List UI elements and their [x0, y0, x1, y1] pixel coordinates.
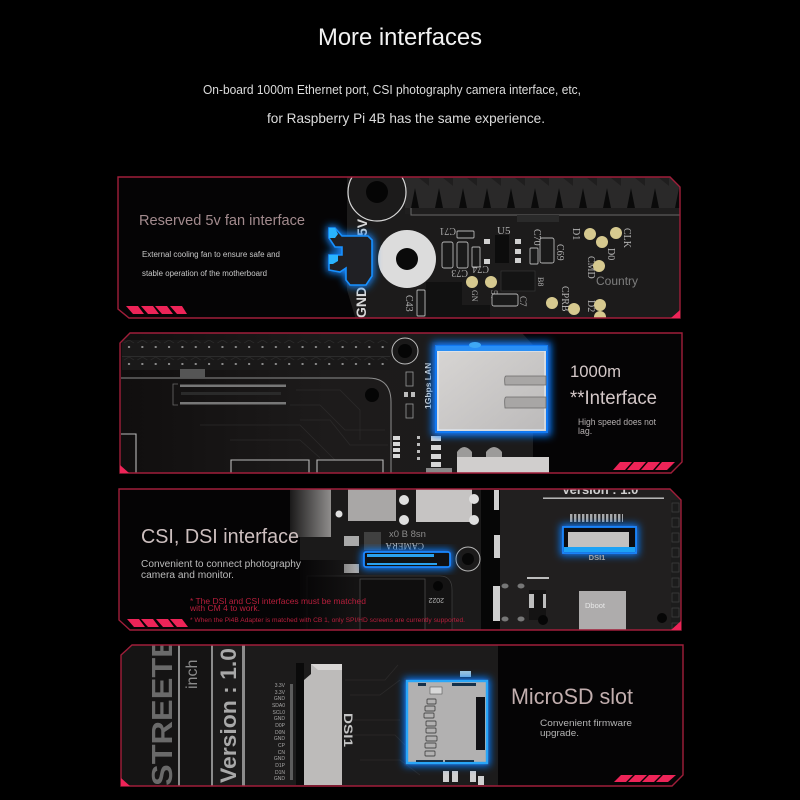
board photo: fan header area	[347, 178, 680, 318]
board photo: fan header area: B8	[536, 277, 545, 286]
description	[578, 417, 657, 436]
board photo: MicroSD area: 3.3V	[275, 690, 286, 696]
board photo: MicroSD area: SDA0	[272, 703, 285, 709]
heading: Reserved 5v fan interface	[139, 212, 305, 229]
board photo: MicroSD area: CN	[278, 750, 285, 756]
panel: ethernet interface	[120, 333, 682, 473]
board photo: fan header area: D1	[570, 228, 581, 240]
board photo: fan header area: C70	[531, 229, 542, 246]
corner accent	[671, 621, 681, 630]
panel frame	[119, 489, 681, 630]
board photo: MicroSD area: GND	[274, 696, 285, 702]
icon: DSI connector highlight	[562, 526, 637, 562]
board photo: fan header area: CPRB	[559, 286, 570, 312]
icon: fan connector highlight	[329, 228, 372, 285]
heading: MicroSD slot	[511, 684, 633, 709]
board photo: ethernet port area	[120, 333, 549, 473]
warning notes: * The DSI and CSI interfaces must be matched	[190, 597, 366, 606]
panel frame	[120, 333, 682, 473]
board photo: MicroSD area: D0N	[275, 730, 285, 736]
infographic canvas	[117, 28, 684, 787]
board photo: fan header area: C73	[451, 267, 468, 278]
description: lag.	[578, 426, 592, 436]
description	[540, 718, 632, 738]
subtitle: for Raspberry Pi 4B has the same experience.	[267, 110, 545, 126]
board photo: MicroSD area: Version : 1.0	[216, 648, 241, 783]
icon: CSI connector highlight	[363, 551, 451, 568]
subtitle	[203, 83, 581, 126]
warning notes: with CM 4 to work.	[189, 604, 260, 613]
board photo: CSI connector area: Version : 1.0	[562, 482, 638, 497]
accent bars	[126, 306, 187, 314]
icon: DSI connector highlight: DSI1	[589, 553, 605, 562]
board photo: MicroSD area: D0P	[275, 723, 286, 729]
corner accent	[121, 778, 130, 786]
description: stable operation of the motherboard	[142, 269, 267, 278]
description: External cooling fan to ensure safe and	[142, 250, 280, 259]
board photo: fan header area: 5V	[354, 218, 370, 236]
board photo: fan header area: 5V	[489, 290, 499, 302]
board photo: CSI connector area	[290, 482, 681, 631]
board photo: MicroSD area: CP	[278, 743, 286, 749]
board photo: CSI connector area: Dboot	[585, 601, 606, 610]
corner accent	[671, 310, 680, 318]
subtitle: On-board 1000m Ethernet port, CSI photography camera interface, etc,	[203, 83, 581, 97]
board photo: fan header area: C7	[518, 296, 528, 307]
panel frame	[121, 645, 683, 786]
accent bars	[127, 619, 188, 627]
description: Convenient to connect photography	[141, 559, 301, 570]
board photo: MicroSD area	[121, 636, 498, 786]
board photo: MicroSD area: GND	[274, 776, 285, 782]
board photo: MicroSD area: GND	[274, 736, 285, 742]
warning notes: * When the Pi4B Adapter is matched with CB 1, only SPI/HD screens are currently supported.	[190, 617, 465, 624]
board photo: fan header area: GND	[353, 287, 369, 318]
accent bars	[613, 462, 675, 470]
board photo: CSI connector area: 2022	[428, 596, 444, 603]
board photo: MicroSD area: SCL0	[272, 710, 285, 716]
board photo: MicroSD area: D1N	[275, 770, 285, 776]
description	[142, 250, 280, 278]
accent bars	[614, 775, 676, 782]
description: upgrade.	[540, 728, 579, 738]
board photo: fan header area: GN	[470, 290, 479, 302]
board photo: fan header area: CLK	[621, 228, 632, 249]
board photo: MicroSD area: 3.3V	[275, 683, 286, 689]
heading: CSI, DSI interface	[141, 526, 299, 548]
corner accent	[120, 465, 129, 473]
board photo: CSI connector area: CAMERA	[385, 541, 424, 551]
description: Convenient firmware	[540, 718, 632, 728]
board photo: fan header area: C71	[439, 225, 456, 236]
board photo: fan header area: D0	[605, 248, 616, 260]
icon: MicroSD slot highlight	[406, 680, 488, 764]
board photo: MicroSD area: inch	[184, 660, 201, 689]
icon: ethernet port highlight	[434, 342, 549, 434]
panel: fan interface	[117, 176, 681, 319]
board photo: fan header area: C69	[554, 244, 565, 261]
board photo: fan header area: U5	[497, 225, 511, 237]
board photo: CSI connector area: x0 B 8sn	[389, 529, 426, 540]
title: More interfaces	[318, 24, 482, 51]
heading	[570, 363, 657, 409]
board photo: fan header area: CMD	[585, 256, 596, 279]
panel frame	[118, 177, 680, 318]
board photo: fan header area: C74	[472, 263, 489, 274]
board photo: fan header area: D2	[585, 300, 596, 312]
panel: MicroSD slot	[121, 636, 683, 786]
description: camera and monitor.	[141, 570, 234, 581]
board photo: MicroSD area: STREETE	[147, 636, 179, 786]
board photo: ethernet port area: 1Gbps LAN	[423, 363, 433, 409]
board photo: MicroSD area: DSI1	[341, 713, 355, 747]
description	[141, 559, 301, 581]
board photo: MicroSD area: GND	[274, 716, 285, 722]
panel: CSI DSI interface	[119, 482, 681, 631]
warning notes	[189, 597, 465, 624]
board photo: fan header area: C43	[403, 295, 414, 312]
heading: **Interface	[570, 387, 657, 409]
heading: 1000m	[570, 363, 621, 381]
board photo: fan header area: Country	[596, 274, 638, 288]
board photo: MicroSD area: D1P	[275, 763, 286, 769]
description: High speed does not	[578, 417, 657, 427]
board photo: MicroSD area: GND	[274, 756, 285, 762]
